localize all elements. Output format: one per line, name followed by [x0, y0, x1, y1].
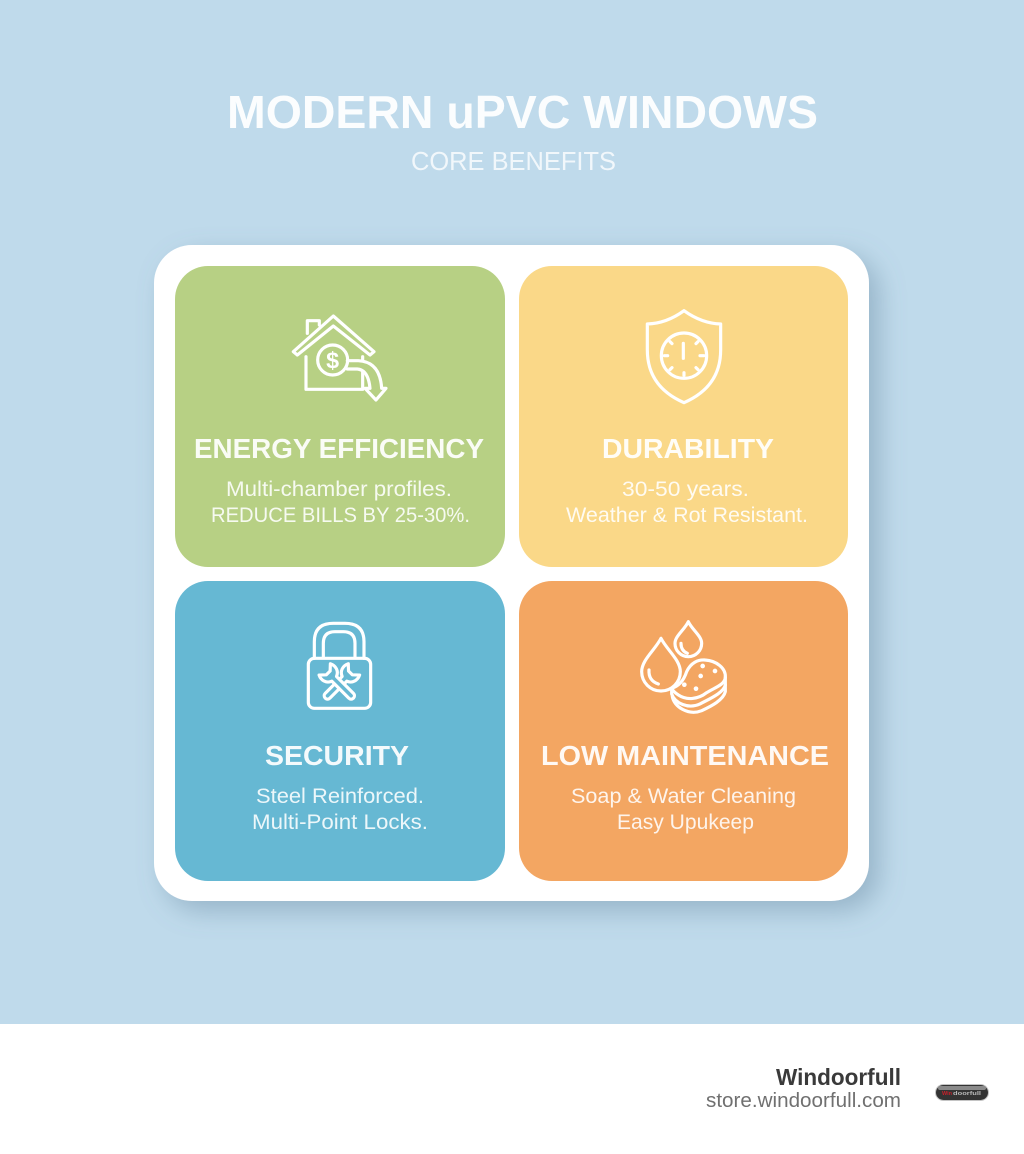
subtitle: CORE BENEFITS: [411, 146, 616, 176]
heading: security: SECURITY: [265, 740, 409, 771]
icon: shield with clock: [647, 311, 721, 403]
icon: house with dollar and down arrow: [293, 316, 386, 400]
logo badge: doorfull: [953, 1091, 982, 1097]
white card: [154, 245, 869, 901]
panel: security: [175, 581, 505, 881]
icon: house with dollar and down arrow: $: [326, 347, 339, 373]
heading: low maintenance: LOW MAINTENANCE: [541, 740, 829, 771]
icon: padlock with crossed wrenches: [308, 623, 371, 708]
heading: durability: DURABILITY: [602, 433, 774, 464]
panel: energy efficiency: [175, 266, 505, 567]
text: security details: Multi-Point Locks.: [252, 810, 428, 834]
heading: energy efficiency: ENERGY EFFICIENCY: [194, 433, 484, 464]
text: security details: [252, 784, 428, 834]
brand name: Windoorfull: [776, 1064, 901, 1090]
text: durability details: [566, 477, 808, 527]
text: durability details: Weather & Rot Resistant.: [566, 503, 808, 527]
panel: durability: [519, 266, 848, 567]
logo badge: Win: [942, 1091, 953, 1097]
title: MODERN uPVC WINDOWS: [227, 86, 818, 138]
text: low maintenance details: Easy Upukeep: [617, 810, 754, 834]
text: security details: Steel Reinforced.: [256, 784, 424, 808]
text: low maintenance details: [571, 784, 796, 834]
brand url: store.windoorfull.com: [706, 1090, 901, 1112]
text: energy efficiency details: Multi-chamber profiles.: [226, 477, 452, 501]
text: energy efficiency details: REDUCE BILLS BY 25-30%.: [211, 503, 470, 527]
text: low maintenance details: Soap & Water Cleaning: [571, 784, 796, 808]
footer band: [0, 1024, 1024, 1154]
icon: water drops and sponge: [642, 622, 725, 712]
text: durability details: 30-50 years.: [622, 477, 749, 501]
text: energy efficiency details: [211, 477, 470, 527]
panel: low maintenance: [519, 581, 848, 881]
logo badge: [936, 1084, 988, 1100]
